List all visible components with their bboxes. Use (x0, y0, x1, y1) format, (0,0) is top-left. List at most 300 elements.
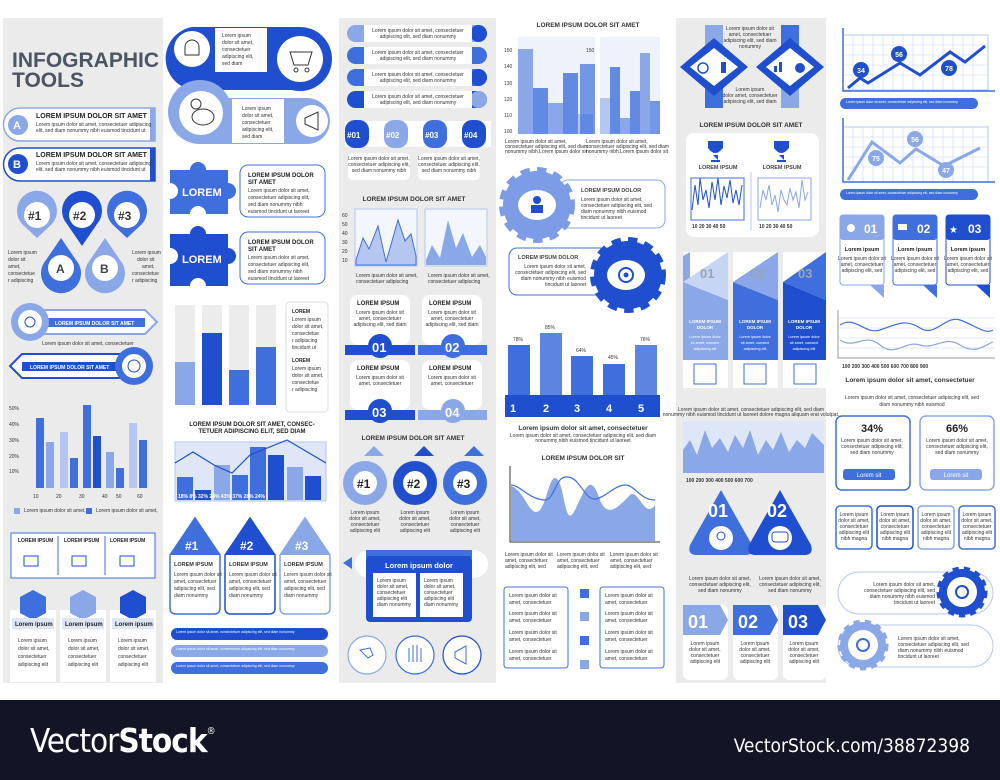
four small boxes: Lorem ipsum (881, 512, 909, 518)
list boxes: Lorem ipsum dolor sit (605, 649, 653, 655)
tag cards 01-03: 02 (917, 222, 931, 236)
grid chart 2: 75 (872, 156, 880, 163)
cards 01-04: amet, consectetuer (431, 381, 474, 387)
area charts col3: 20 (342, 249, 348, 255)
diamonds: adipiscing elit, sed diam (723, 38, 777, 44)
gear 1 (503, 171, 665, 239)
pill: piggy and megaphone: adipiscing elit, (242, 127, 273, 133)
gear pills: tincidunt ut laoreet (894, 600, 936, 606)
cylinders: r adipiscing (292, 338, 318, 344)
wave line chart: adipiscing elit, sed (505, 564, 546, 570)
gear pills: Lorem ipsum dolor sit amet, (873, 582, 935, 588)
ribbon cards 01-03: adipiscing elit (744, 347, 767, 351)
hexagon cards: consectetuer (18, 654, 47, 660)
circles #1-#3: Lorem ipsum (451, 510, 479, 516)
3D bar chart: 85% (545, 325, 556, 331)
tag cards 01-03: amet, consectetuer (947, 262, 990, 268)
pill: piggy and megaphone: dolor sit amet, (242, 113, 273, 119)
cylinders: LOREM (292, 358, 310, 364)
col4 bar charts: Lorem ipsum dolor sit amet, (505, 139, 567, 145)
mountain chart col5: nonummy nibh euismod tincidunt ut laoreet dolore magna aliquam erat volutpat. (663, 412, 839, 418)
hexagon cards (10, 590, 156, 682)
banner B: B (13, 159, 21, 171)
percent boxes: Lorem ipsum dolor sit amet, (926, 438, 988, 444)
pentagon cards: diam nonummy (229, 593, 264, 599)
pill: piggy and megaphone: consectetuer (242, 120, 271, 126)
circles #1-#3: adipiscing elit (400, 528, 431, 534)
pentagon cards: Lorem ipsum dolor sit (174, 572, 222, 578)
pins #1 #2 #3 A B (8, 191, 161, 293)
gear pills: tincidunt ut laoreet (898, 654, 939, 660)
circles #1-#3: consectetuer (401, 522, 430, 528)
area charts col3: 60 (342, 213, 348, 219)
blue text bars: Lorem ipsum dolor sit amet, consectetuer adipiscing elit, sed diam nonummy (176, 647, 295, 651)
percent boxes: 66% (946, 423, 968, 435)
list boxes: amet, consectetuer (509, 637, 552, 643)
callout box lorem ipsum dolor: adipiscing elit (377, 596, 408, 602)
wave line chart (505, 455, 660, 570)
3D bar chart: 64% (576, 348, 587, 354)
area charts col3: 30 (342, 240, 348, 246)
gear 2: consectetuer adipiscing elit, sed (515, 270, 586, 276)
hexagon cards: consectetuer (68, 654, 97, 660)
pentagon cards: diam nonummy (284, 593, 319, 599)
three icon boxes: LOREM IPSUM (18, 538, 53, 544)
col4 bar charts: consectetuer adipiscing elit, sed diam (505, 144, 588, 150)
grid chart 1 (840, 28, 995, 109)
triangles 01 02: Lorem ipsum dolor sit amet, (759, 576, 821, 582)
list boxes: amet, consectetuer (509, 656, 552, 662)
pentagon cards: Lorem ipsum dolor sit (284, 572, 332, 578)
diamonds: dolor amet, consectetuer (722, 93, 778, 99)
numbered tabs #01-#04: Lorem ipsum dolor sit amet, (348, 156, 410, 162)
cylinders: tincidunt ut (292, 345, 317, 351)
gear pills: consectetuer adipiscing elit, sed (864, 588, 935, 594)
hexagon cards: adipiscing elit (68, 662, 99, 668)
arrow banners (10, 303, 157, 385)
ribbon cards 01-03: 03 (798, 266, 812, 281)
cards 01-04: Lorem ipsum dolor sit (356, 310, 405, 316)
blue text bars (171, 628, 328, 674)
wave line chart: amet, consectetuer (505, 558, 548, 564)
3D bar chart: 76% (640, 337, 651, 343)
pill: bell and cart: dolor sit amet, (222, 40, 253, 46)
bar chart col1: 30% (9, 438, 20, 444)
cards 01-03 col5: adipiscing elit (789, 659, 820, 665)
hexagon cards: Lorem ipsum (15, 622, 53, 628)
tag cards 01-03: ★ (949, 225, 958, 236)
puzzle 2: sed diam nonummy nibh (248, 269, 303, 275)
tag cards 01-03: Lorem ipsum (951, 247, 985, 253)
cylinders: dolor sit amet, (292, 324, 323, 330)
pill: bell and cart (166, 27, 332, 91)
circles #1-#3: #1 (357, 477, 371, 491)
footer bar (0, 700, 1000, 780)
cards 01-04: Lorem ipsum dolor sit (428, 310, 477, 316)
bar chart col1: 10 (33, 494, 39, 500)
callout box lorem ipsum dolor: adipiscing elit (424, 596, 455, 602)
circles #1-#3: adipiscing elit (450, 528, 481, 534)
pins #1 #2 #3 A B: Lorem ipsum (8, 250, 37, 256)
cards 01-04: 04 (445, 405, 460, 420)
four small boxes: adipiscing elit (962, 530, 993, 536)
3D bar chart: 3 (574, 403, 580, 415)
title: TOOLS (12, 69, 84, 92)
circles #1-#3: consectetuer (351, 522, 380, 528)
ribbon cards 01-03: DOLOR (697, 325, 714, 330)
mountain chart col5: 100 200 300 400 500 600 700 (686, 478, 753, 484)
cards 01-03 col5: dolor sit amet, (689, 647, 721, 653)
cards 01-03 col5: dolor sit amet, (739, 647, 771, 653)
cards 01-03 col5: Lorem ipsum (790, 641, 818, 647)
pentagon cards: #2 (240, 539, 254, 553)
gear pills (838, 569, 993, 668)
area charts col3: 40 (342, 231, 348, 237)
numbered tabs #01-#04: sed diam nonummy nibh (352, 168, 406, 174)
hand icons (348, 636, 481, 674)
four small boxes: dolor sit amet, (920, 518, 952, 524)
four small boxes: dolor sit amet, (838, 518, 870, 524)
gear pills: consectetuer adipiscing elit, sed (898, 642, 969, 648)
banner B: Lorem ipsum dolor sit amet, consectetuer adipiscing (36, 161, 152, 167)
percent boxes: sed diam nonummy (850, 450, 894, 456)
tag cards 01-03: amet, consectetuer (841, 262, 884, 268)
four small boxes: adipiscing elit (839, 530, 870, 536)
pill: bell and cart: consectetuer (222, 47, 251, 53)
diamonds: Lorem ipsum dolor sit (726, 26, 775, 32)
pins #1 #2 #3 A B: dolor sit (137, 257, 155, 263)
bar chart col1: Lorem ipsum dolor sit amet, (96, 508, 158, 514)
cards 01-04: Lorem ipsum dolor sit (356, 375, 405, 381)
puzzle 1: LOREM (182, 187, 222, 199)
percent boxes: consectetuer adipiscing elit, (841, 444, 903, 450)
numbered tabs #01-#04 (345, 120, 491, 180)
3D bar chart: 45% (608, 355, 619, 361)
cylinders: dolor sit amet, (292, 373, 323, 379)
3D bar chart: nonummy nibh euismod tincidunt ut laoreet (535, 438, 631, 444)
diamonds (680, 25, 824, 108)
cards 01-04: 01 (372, 340, 386, 355)
area charts col3: Lorem ipsum dolor sit amet, (428, 273, 490, 279)
banner A: LOREM IPSUM DOLOR SIT AMET (36, 113, 148, 120)
pins #1 #2 #3 A B: #3 (118, 209, 132, 223)
four small boxes: consectetuer (963, 524, 992, 530)
cards 01-04: 03 (372, 405, 386, 420)
line chart col6: diam nonummy nibh euismod (879, 402, 945, 408)
col4 bar charts: 110 (504, 113, 512, 119)
list boxes: Lorem ipsum dolor sit (509, 649, 557, 655)
pill: piggy and megaphone: Lorem ipsum (242, 106, 271, 112)
four small boxes: consectetuer (840, 524, 869, 530)
numbered tabs #01-#04: #03 (425, 131, 439, 140)
tag cards 01-03: Lorem ipsum (898, 247, 932, 253)
title: INFOGRAPHIC (12, 49, 159, 72)
banner A: elit, sed diam nonummy nibh euismod tincidunt ut (36, 128, 146, 134)
tag cards 01-03: amet, consectetuer (894, 262, 937, 268)
pill: piggy and megaphone (168, 80, 330, 144)
cards 01-03 col5: 03 (788, 612, 808, 632)
percent boxes: Lorem sit (857, 473, 882, 479)
mountain chart col5: Lorem ipsum dolor sit amet, consectetuer adipiscing elit, sed diam (678, 407, 824, 413)
gear pills: Lorem ipsum dolor sit amet, (898, 636, 960, 642)
pins #1 #2 #3 A B: amet, (142, 264, 155, 270)
footer bar: ® (207, 726, 215, 737)
triangles 01 02: consectetuer adipiscing elit, (689, 582, 751, 588)
cylinders: Lorem ipsum (292, 317, 321, 323)
wave line chart: amet, consectetuer (610, 558, 653, 564)
four small boxes: nibh magna (882, 536, 908, 542)
pentagon cards (170, 518, 332, 614)
trophy spike panel: LOREM IPSUM (763, 165, 802, 171)
trophy spike panel: LOREM IPSUM (699, 165, 738, 171)
four pill rows: adipiscing elit, sed diam nonummy (380, 100, 457, 106)
col4 bar charts: 150 (586, 48, 595, 54)
line chart col6: Lorem ipsum dolor sit amet, consectetuer adipiscing elit, sed (845, 395, 979, 401)
four pill rows: Lorem ipsum dolor sit amet, consectetuer (372, 28, 464, 34)
bar chart col1 (9, 405, 158, 514)
cards 01-04: amet, consectetuer (359, 381, 402, 387)
tag cards 01-03: adipiscing elit, sed (895, 268, 936, 274)
cards 01-03 col5: adipiscing elit (740, 659, 771, 665)
cards 01-04: 02 (445, 340, 459, 355)
blue text bars: Lorem ipsum dolor sit amet, consectetuer adipiscing elit, sed diam nonummy (176, 664, 295, 668)
ribbon cards 01-03: Lorem ipsum dolor (788, 335, 820, 339)
pill: bell and cart: adipiscing elit, (222, 54, 253, 60)
gear pills: diam nonummy nibh euismod (898, 648, 964, 654)
puzzle 2: euismod tincidunt ut laoreet (248, 276, 310, 282)
cylinders (175, 302, 328, 412)
pentagon cards: amet, consectetuer (174, 579, 217, 585)
grid chart 2 (840, 118, 995, 200)
list boxes: amet, consectetuer (509, 618, 552, 624)
cards 01-04: amet, consectetuer (359, 316, 402, 322)
puzzle 2: LOREM IPSUM DOLOR (248, 240, 314, 246)
pins #1 #2 #3 A B: r adipiscing (132, 278, 158, 284)
four small boxes: consectetuer (922, 524, 951, 530)
grid chart 2: 47 (942, 168, 950, 175)
tag cards 01-03 (838, 215, 993, 298)
callout box lorem ipsum dolor: Lorem ipsum dolor (385, 561, 453, 570)
tag cards 01-03: Lorem ipsum dolor sit (944, 256, 993, 262)
gear 1: LOREM IPSUM DOLOR (581, 188, 641, 194)
cards 01-03 col5: Lorem ipsum (691, 641, 719, 647)
area charts col3 (342, 196, 490, 285)
circles #1-#3: #3 (457, 477, 471, 491)
trophy spike panel: LOREM IPSUM DOLOR SIT AMET (699, 122, 803, 129)
combo chart col2 (175, 422, 326, 501)
tag cards 01-03: adipiscing elit, sed (842, 268, 883, 274)
ribbon cards 01-03: 01 (700, 266, 714, 281)
callout box lorem ipsum dolor: Lorem ipsum (377, 578, 406, 584)
ribbon cards 01-03 (683, 252, 826, 388)
cards 01-03 col5: 01 (688, 612, 708, 632)
3D bar chart: 78% (513, 337, 524, 343)
list boxes: Lorem ipsum dolor sit (509, 630, 557, 636)
list boxes: Lorem ipsum dolor sit (605, 630, 653, 636)
cards 01-03 col5: consectetuer (790, 653, 819, 659)
callout box lorem ipsum dolor: dolor sit amet, (424, 584, 455, 590)
puzzle 1: Lorem ipsum dolor sit amet, (248, 188, 310, 194)
four pill rows: adipiscing elit, sed diam nonummy (380, 34, 457, 40)
list boxes: amet, consectetuer (605, 637, 648, 643)
3D bar chart: 5 (638, 403, 644, 415)
trophy spike panel: 10 20 30 40 50 (759, 224, 793, 230)
numbered tabs #01-#04: #02 (386, 131, 400, 140)
pentagon cards: adipiscing elit, sed (284, 586, 325, 592)
hexagon cards: adipiscing elit (118, 662, 149, 668)
col4 bar charts: 130 (504, 81, 513, 87)
wave line chart: adipiscing elit, sed (557, 564, 598, 570)
cards 01-04: adipiscing elit, sed diam (353, 322, 407, 328)
list boxes: Lorem ipsum dolor sit (509, 611, 557, 617)
hexagon cards: Lorem ipsum (115, 622, 153, 628)
four pill rows: Lorem ipsum dolor sit amet, consectetuer (372, 50, 464, 56)
ribbon cards 01-03: adipiscing elit (694, 347, 717, 351)
circles #1-#3 (343, 435, 487, 534)
gear 1: diam nonummy nibh euismod (581, 209, 647, 215)
banner A (4, 108, 155, 141)
col4 bar charts: nonummy nibh.Lorem ipsum dolor sit (505, 149, 588, 155)
ribbon cards 01-03: DOLOR (796, 325, 813, 330)
puzzle 2: LOREM (182, 254, 222, 266)
3D bar chart (505, 325, 660, 444)
four small boxes: adipiscing elit (921, 530, 952, 536)
pentagon cards: LOREM IPSUM (174, 562, 213, 568)
diamonds: amet, consectetuer (729, 32, 772, 38)
four small boxes: nibh magna (923, 536, 949, 542)
diamonds: adipiscing elit, sed diam (723, 99, 777, 105)
ribbon cards 01-03: DOLOR (747, 325, 764, 330)
col4 bar charts: LOREM IPSUM DOLOR SIT AMET (536, 22, 640, 29)
list boxes: Lorem ipsum dolor sit (509, 593, 557, 599)
puzzle 1: sed diam nonummy nibh (248, 202, 303, 208)
bar chart col1: 20 (56, 494, 62, 500)
3D bar chart: Lorem ipsum dolor sit amet, consectetuer adipiscing elit, sed diam (510, 433, 656, 439)
hexagon cards: Lorem ipsum (18, 638, 47, 644)
triangles 01 02: sed diam nonummy (768, 588, 812, 594)
diamonds: nonummy (739, 44, 761, 50)
pins #1 #2 #3 A B: dolor sit (8, 257, 26, 263)
area charts col3: 50 (342, 222, 348, 228)
cards 01-03 col5: 02 (738, 612, 758, 632)
pill: bell and cart: sed diam (222, 61, 242, 67)
hexagon cards: Lorem ipsum (65, 622, 103, 628)
ribbon cards 01-03: Lorem ipsum dolor (689, 335, 721, 339)
col4 bar charts: 100 (504, 129, 513, 135)
list boxes: amet, consectetuer (605, 600, 648, 606)
callout box lorem ipsum dolor: diam nonummy (377, 602, 412, 608)
gear 1: tincidunt ut laoreet (581, 215, 622, 221)
four small boxes: Lorem ipsum (840, 512, 868, 518)
circles #1-#3: dolor sit amet, (349, 516, 381, 522)
cards 01-04: adipiscing elit, sed diam (425, 322, 479, 328)
hexagon cards: Lorem ipsum (68, 638, 97, 644)
diamonds: Lorem ipsum (736, 87, 764, 93)
pins #1 #2 #3 A B: A (56, 262, 65, 276)
tag cards 01-03: adipiscing elit, sed (948, 268, 989, 274)
arrow banners: LOREM IPSUM DOLOR SIT AMET (55, 321, 134, 327)
numbered tabs #01-#04: Lorem ipsum dolor sit amet, (418, 156, 480, 162)
bar chart col1: 40% (9, 422, 20, 428)
banner A: Lorem ipsum dolor sit amet, consectetuer adipiscing (36, 122, 152, 128)
area charts col3: Lorem ipsum dolor sit amet, (356, 273, 418, 279)
tag cards 01-03: 03 (968, 222, 982, 236)
cards 01-04: Lorem ipsum dolor sit (428, 375, 477, 381)
numbered tabs #01-#04: consectetuer adipiscing elit, (418, 162, 480, 168)
3D bar chart: 4 (606, 403, 613, 415)
tag cards 01-03: Lorem ipsum dolor sit (891, 256, 940, 262)
pentagon cards: #3 (295, 539, 309, 553)
hexagon cards: adipiscing elit (18, 662, 49, 668)
banner B: LOREM IPSUM DOLOR SIT AMET (36, 152, 148, 159)
pentagon cards: LOREM IPSUM (284, 562, 323, 568)
wave line chart: adipiscing elit, sed (610, 564, 651, 570)
numbered tabs #01-#04: consectetuer adipiscing elit, (348, 162, 410, 168)
ribbon cards 01-03: 02 (750, 266, 764, 281)
gear 2 (509, 241, 662, 309)
wave line chart: LOREM IPSUM DOLOR SIT (541, 455, 625, 462)
banner A: A (13, 120, 21, 132)
mountain chart col5 (663, 407, 839, 484)
grid chart 1: 34 (857, 68, 865, 75)
four small boxes: nibh magna (964, 536, 990, 542)
puzzle 2: consectetuer adipiscing elit, (248, 262, 309, 268)
three icon boxes: LOREM IPSUM (64, 538, 99, 544)
title (12, 49, 159, 92)
3D bar chart: Lorem ipsum dolor sit amet, consectetuer (518, 425, 648, 432)
gear pills: diam nonummy nibh euismod (870, 594, 935, 600)
line chart col6: 100 200 300 400 500 600 700 800 900 (842, 364, 928, 370)
pins #1 #2 #3 A B: B (100, 262, 109, 276)
ribbon cards 01-03: Lorem ipsum dolor (739, 335, 771, 339)
banner B: elit, sed diam nonummy nibh euismod tincidunt ut (36, 167, 146, 173)
four small boxes: consectetuer (881, 524, 910, 530)
pins #1 #2 #3 A B: r adipiscing (8, 278, 34, 284)
col4 bar charts: 150 (504, 48, 513, 54)
triangles 01 02: 01 (708, 501, 728, 521)
area charts col3: consectetuer adipiscing (356, 279, 408, 285)
wave line chart: amet, consectetuer (557, 558, 600, 564)
callout box lorem ipsum dolor: dolor sit amet, (377, 584, 408, 590)
cylinders: consectetue (292, 380, 319, 386)
pill: piggy and megaphone: sed diam (242, 134, 262, 140)
footer bar: VectorStock (30, 721, 207, 760)
grid chart 1: Lorem ipsum dolor sit amet, consectetuer adipiscing elit, sed diam nonummy (846, 100, 958, 104)
cards 01-03 col5: dolor sit amet, (788, 647, 820, 653)
four small boxes (836, 506, 995, 549)
area charts col3: 10 (342, 258, 348, 264)
cylinders: consectetue (292, 331, 319, 337)
pins #1 #2 #3 A B: consectetue (8, 271, 35, 277)
bar chart col1: 20% (9, 454, 20, 460)
grid chart 1: 56 (895, 52, 903, 59)
four pill rows: Lorem ipsum dolor sit amet, consectetuer (372, 94, 464, 100)
percent boxes: 34% (861, 423, 883, 435)
ribbon cards 01-03: sit amet, consect (691, 341, 720, 345)
pins #1 #2 #3 A B: Lorem ipsum (132, 250, 161, 256)
callout box lorem ipsum dolor: Lorem ipsum (424, 578, 453, 584)
col4 bar charts (504, 22, 669, 155)
combo chart col2: LOREM IPSUM DOLOR SIT AMET, CONSEC- (189, 422, 315, 428)
col4 bar charts: consectetuer adipiscing elit, sed diam (586, 144, 669, 150)
numbered tabs #01-#04: sed diam nonummy nibh (422, 168, 476, 174)
four small boxes: nibh magna (841, 536, 867, 542)
four small boxes: dolor sit amet, (879, 518, 911, 524)
bar chart col1: 50 (116, 494, 122, 500)
cards 01-04: LOREM IPSUM (357, 301, 399, 307)
pentagon cards: Lorem ipsum dolor sit (229, 572, 277, 578)
four small boxes: Lorem ipsum (922, 512, 950, 518)
